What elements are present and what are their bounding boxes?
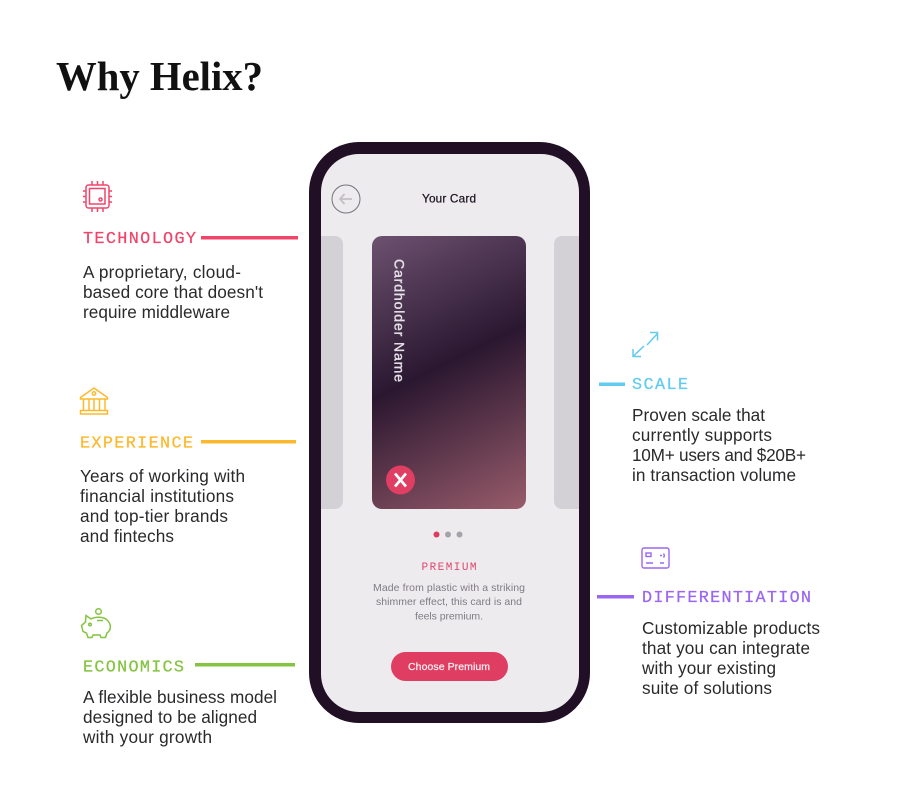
phone mockup [309, 142, 590, 723]
left card peek [321, 236, 343, 509]
description: currently supports [632, 425, 772, 445]
plan description: feels premium. [415, 610, 483, 622]
heading: EXPERIENCE [80, 434, 193, 454]
plan label: PREMIUM [422, 562, 476, 574]
description: A flexible business model [83, 687, 277, 707]
connector [201, 440, 296, 444]
icon: chip [83, 181, 112, 212]
description: Proven scale that [632, 405, 765, 425]
plan description: shimmer effect, this card is and [376, 596, 522, 608]
description: with your existing [641, 658, 776, 678]
plan description: Made from plastic with a striking [373, 582, 525, 594]
right card peek [554, 236, 579, 509]
description: A proprietary, cloud- [83, 262, 241, 282]
back button [332, 185, 360, 213]
connector [599, 382, 625, 386]
description: Years of working with [80, 466, 245, 486]
description [632, 405, 806, 485]
plan description [373, 582, 525, 622]
connector [201, 236, 298, 240]
description: in transaction volume [632, 465, 796, 485]
panel: differentiation [597, 548, 820, 698]
description: suite of solutions [642, 678, 772, 698]
connector [195, 663, 295, 666]
heading: ECONOMICS [83, 658, 184, 678]
screen heading: Your Card [422, 192, 476, 206]
description: with your growth [82, 727, 212, 747]
description: that you can integrate [642, 638, 810, 658]
phone frame [309, 142, 590, 723]
main card [372, 236, 526, 509]
icon: bank [80, 388, 108, 414]
description: require middleware [83, 302, 230, 322]
description [641, 618, 820, 698]
description [80, 466, 245, 546]
choose premium button [391, 652, 508, 681]
description: based core that doesn't [83, 282, 263, 302]
cardholder name: Cardholder Name [392, 259, 408, 382]
icon: contactless card [642, 548, 669, 568]
heading: DIFFERENTIATION [642, 589, 811, 608]
phone screen [321, 154, 579, 712]
description: financial institutions [80, 486, 234, 506]
choose premium button: Choose Premium [408, 661, 490, 673]
description: and top-tier brands [80, 506, 228, 526]
description: Customizable products [642, 618, 820, 638]
connector [597, 595, 634, 598]
icon: expand arrows [633, 332, 658, 356]
carousel dots [434, 532, 462, 538]
panel: scale [599, 332, 806, 485]
panel: economics [82, 609, 295, 747]
description [82, 687, 277, 747]
panel: technology [83, 181, 298, 322]
description [83, 262, 263, 322]
panel: experience [80, 388, 296, 546]
title: Why Helix? [56, 53, 263, 99]
description: 10M+ users and $20B+ [632, 445, 806, 465]
heading: TECHNOLOGY [83, 230, 196, 249]
icon: piggy bank [82, 609, 110, 638]
description: designed to be aligned [83, 707, 257, 727]
card logo [386, 466, 415, 494]
description: and fintechs [80, 526, 174, 546]
heading: SCALE [632, 376, 688, 395]
